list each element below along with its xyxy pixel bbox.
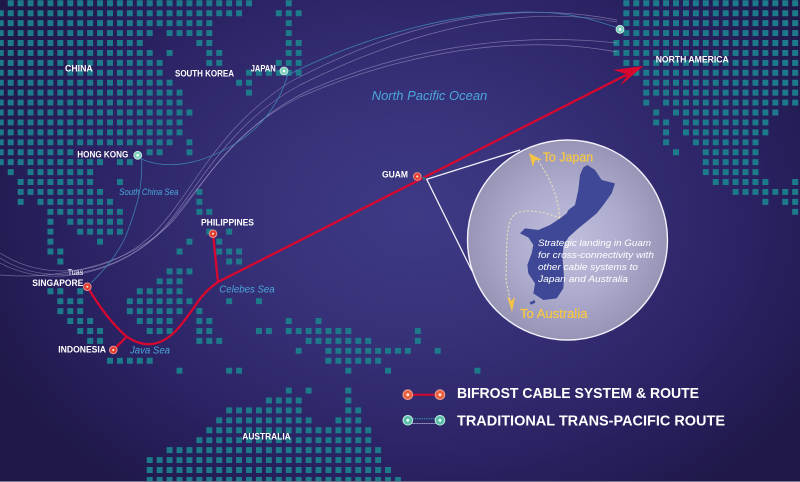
arrowhead: to Australia bbox=[507, 296, 515, 312]
legend: Bifrost route: BIFROST CABLE SYSTEM & ROUTE bbox=[457, 385, 699, 402]
traditional cable: Hong Kong to Japan bbox=[141, 74, 288, 165]
inset description: for cross-connectivity with bbox=[538, 250, 654, 261]
location labels: GUAM bbox=[382, 169, 408, 180]
Guam inset circle bbox=[468, 140, 668, 340]
label: To Australia: To Australia bbox=[520, 307, 588, 321]
legend: traditional route: TRADITIONAL TRANS-PACIFIC ROUTE bbox=[457, 412, 725, 429]
traditional trans-pacific cables bbox=[0, 12, 618, 283]
location labels: INDONESIA bbox=[58, 344, 106, 355]
node: Hong Kong bbox=[134, 151, 142, 159]
label: Java Sea: Java Sea bbox=[129, 345, 170, 356]
inset description bbox=[537, 238, 654, 285]
label: North Pacific Ocean: North Pacific Ocean bbox=[372, 88, 487, 103]
arrowhead: North America bbox=[613, 66, 644, 86]
location labels: HONG KONG bbox=[77, 149, 128, 160]
location labels: AUSTRALIA bbox=[242, 430, 291, 441]
callout connector lines bbox=[427, 150, 520, 271]
location labels: SINGAPORE bbox=[32, 277, 83, 288]
Bifrost cable route bbox=[87, 73, 630, 350]
node: Indonesia bbox=[110, 346, 117, 354]
legend bbox=[403, 385, 725, 429]
label: South China Sea: South China Sea bbox=[119, 187, 178, 197]
label: To Japan: To Japan bbox=[543, 150, 593, 164]
inset description: other cable systems to bbox=[538, 262, 639, 273]
node: Singapore bbox=[84, 283, 91, 291]
location labels: CHINA bbox=[65, 63, 93, 74]
dashed route to Japan bbox=[536, 158, 560, 218]
small teal dot near Guam bbox=[422, 177, 425, 180]
node: North America landing bbox=[616, 25, 624, 33]
location labels: SOUTH KOREA bbox=[175, 68, 234, 79]
label: Celebes Sea: Celebes Sea bbox=[219, 285, 275, 296]
location labels: PHILIPPINES bbox=[201, 216, 254, 227]
arrowhead: to Japan bbox=[529, 153, 542, 167]
node: Philippines bbox=[209, 230, 217, 238]
location labels bbox=[32, 54, 729, 441]
traditional cable: Hong Kong to Singapore bbox=[91, 158, 142, 283]
node: Guam bbox=[414, 173, 421, 180]
inset description: Strategic landing in Guam bbox=[538, 238, 651, 249]
dashed route to Australia bbox=[506, 211, 560, 300]
island of Guam bbox=[520, 165, 615, 305]
node: Japan bbox=[280, 67, 288, 75]
label: Tuas: Tuas bbox=[68, 268, 83, 277]
traditional cable: Japan to North America bbox=[286, 12, 618, 76]
location labels: JAPAN bbox=[251, 62, 276, 73]
inset description: Japan and Australia bbox=[537, 274, 628, 285]
location labels: NORTH AMERICA bbox=[656, 54, 729, 65]
